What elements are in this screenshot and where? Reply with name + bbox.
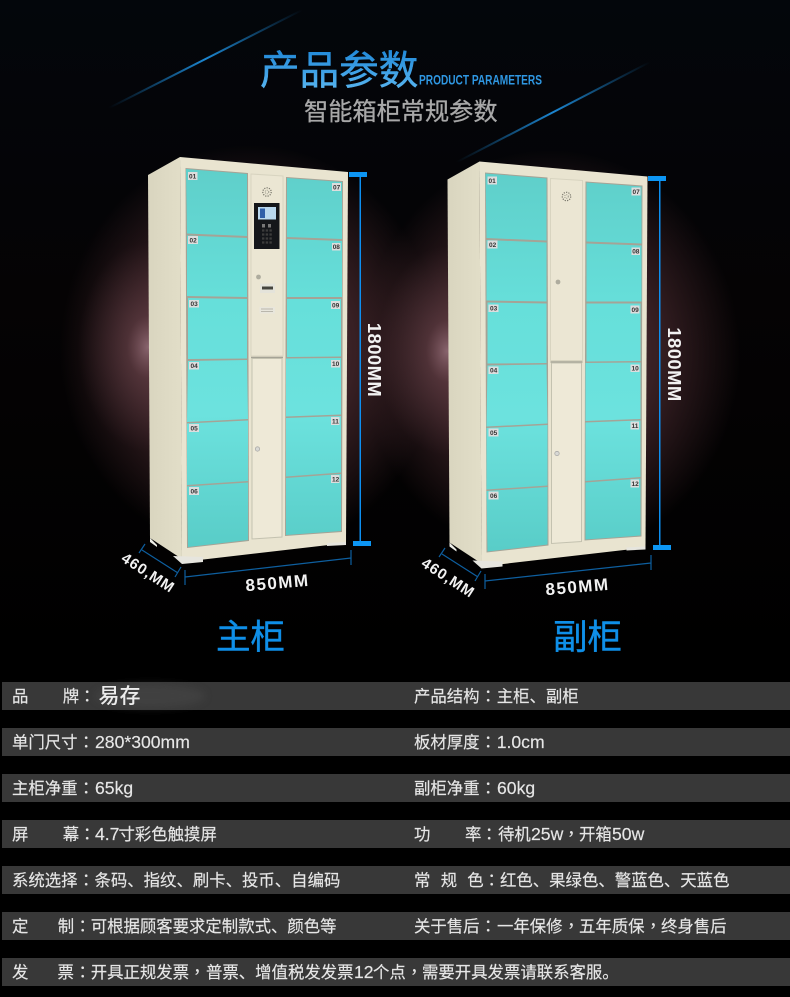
label: secondary cabinet: 副柜 [553,619,622,657]
depth dimension line [139,544,181,577]
spec row 7: 开具正规发票 [91,964,189,982]
door 09 [586,304,640,362]
icon: speaker [263,188,271,196]
depth dimension line [439,548,481,581]
spec row 3: 副柜净重 [414,780,480,798]
spec table [2,682,790,986]
door 03 [488,302,546,364]
door 10: 10 [632,366,639,372]
door 09: 09 [632,307,639,314]
spec row 4: 待机 [498,826,531,844]
spec row 4: 50w [612,824,645,844]
spec row 6: 可根据顾客要求定制款式、颜色等 [91,918,337,936]
control panel [251,174,283,358]
lower center door [552,363,582,544]
highlight: secondary cabinet left [377,246,517,456]
spec row 7: ： [74,959,91,983]
door 07 [586,182,642,244]
highlight: main cabinet left [78,242,218,452]
door 04: 04 [190,363,198,370]
door 01 [486,174,546,240]
door 08: 08 [632,248,640,256]
door 09 [287,299,341,357]
spec row 7: 需要开具发票请联系客服。 [422,964,619,982]
door 02: 02 [489,242,497,249]
door 06: 06 [490,493,498,500]
width dimension line [485,555,651,589]
spec row 4: 功 [414,826,430,844]
spec row 3: 65kg [95,778,133,798]
height label: 1800MM [364,323,385,397]
secondary cabinet [448,162,648,568]
spec row 4 [2,820,790,848]
depth label: 460,MM [118,550,178,597]
spec row 1: 品 [12,688,28,706]
spec row 2 [2,728,790,756]
spec row 4: 寸彩色触摸屏 [118,826,217,844]
spec row 4: 率 [465,826,481,844]
label plate [260,307,275,314]
spec row 2: 280*300mm [95,732,190,752]
door 11 [586,420,640,481]
spec row 4: ： [79,821,95,845]
spec row 7: 个点 [373,964,406,982]
spec row 5: ： [484,867,500,891]
title: 产品参数 [260,49,418,93]
door 04 [187,360,248,422]
door 03: 03 [490,306,498,312]
door 09: 09 [332,302,340,310]
spec row 3: 主柜净重 [12,780,78,798]
cabinet body [148,157,348,564]
spec row 6 [2,912,790,940]
door 04: 04 [490,368,498,374]
door 03 [188,298,247,359]
spec row 2: 单门尺寸 [12,734,78,752]
spec row 3: ： [480,775,496,799]
door 08: 08 [333,244,340,251]
spec row 1: 牌 [63,688,79,706]
door 01 [186,169,247,236]
spec row 3: ： [78,775,94,799]
spec row 2: ： [480,729,496,753]
spec row 4: ： [481,821,497,845]
spec row 6: 终身售后 [661,918,727,936]
door 07: 07 [632,189,640,196]
door 11: 11 [632,423,639,430]
spec row 5: 红色、果绿色、警蓝色、天蓝色 [500,872,729,890]
door 11 [286,416,341,476]
icon: speaker [562,192,571,201]
decorative line left [109,10,302,108]
spec row 3 [2,774,790,802]
spec row 1: 易存 [98,685,140,708]
door 11: 11 [332,418,339,426]
dimensions: main cabinet [118,172,385,597]
spec row 6: 定 [12,918,28,936]
spec row 7: 票 [58,964,74,982]
background glow: main cabinet [60,145,440,555]
height label: 1800MM [664,327,685,402]
spec row 4: 开箱 [579,826,612,844]
door 05: 05 [190,426,198,432]
icon: knob [256,275,261,279]
door 02 [187,236,247,297]
door 05 [187,420,248,485]
spec row 5: 条码、指纹、刷卡、投币、自编码 [94,872,340,890]
door 12 [286,474,341,535]
spec row 7: 普票、增值税发发票 [206,964,354,982]
subtitle: 智能箱柜常规参数 [304,99,498,126]
door 12: 12 [632,481,639,488]
background glow: secondary cabinet [360,150,740,560]
center panel [550,178,582,362]
spec row 1: 产品结构 [414,688,480,706]
door 12 [586,478,640,540]
spec row 7: ， [189,959,205,983]
spec row 4: 4.7 [95,824,119,844]
door 08 [287,239,342,297]
card reader [260,284,275,293]
door 10 [286,358,341,416]
door 02 [486,240,546,302]
cabinet body [448,162,648,568]
spec row 2: 1.0cm [497,732,545,752]
spec row 1: ： [480,683,496,707]
spec row 7: 发 [12,964,28,982]
door 01: 01 [189,174,197,180]
height dimension arrow [648,176,671,550]
icon: knob [556,280,560,284]
door 06: 06 [190,488,198,496]
width label: 850MM [245,571,310,595]
touch screen keypad [254,203,280,249]
spec row 7 [2,958,790,986]
spec row 6: 五年质保 [579,918,645,936]
spec row 5: 常 [414,872,430,890]
spec row 5: ： [78,867,94,891]
title english: PRODUCT PARAMETERS [419,72,542,88]
spec row 1: 主柜、副柜 [497,688,579,706]
door 06 [187,482,248,547]
spec row 6: ： [480,913,496,937]
width label: 850MM [545,575,610,599]
spec row 4: 屏 [12,826,28,844]
spec row 7: ， [406,959,422,983]
spec row 6: ， [563,913,579,937]
spec row 3: 60kg [497,778,535,798]
decorative line right [457,62,650,162]
door 10: 10 [332,361,340,368]
door 10 [586,362,640,421]
door 07: 07 [333,184,341,192]
spec row 4: ， [563,821,579,845]
door 06 [486,487,548,552]
main cabinet [148,157,348,564]
door 02: 02 [190,238,197,244]
spec row 1: ： [79,683,95,707]
spec row 5: 系统选择 [12,872,78,890]
spec row 5: 规 [441,872,457,890]
door 03: 03 [190,301,198,308]
door 12: 12 [332,476,340,484]
label: main cabinet: 主柜 [216,619,285,657]
height dimension arrow [349,172,371,546]
spec row 7: 12 [354,962,374,982]
dimensions: secondary cabinet [418,176,685,602]
spec row 4: 25w [531,824,564,844]
door 05: 05 [490,430,498,437]
door 07 [287,178,342,239]
spec row 1 [2,682,790,710]
door 01: 01 [488,178,496,185]
spec row 6: ， [645,913,661,937]
spec row 2: ： [78,729,94,753]
door 08 [586,244,642,302]
spec row 4: 幕 [63,826,79,844]
door 05 [486,425,548,490]
depth label: 460,MM [418,555,478,602]
lower center door [252,358,282,539]
spec row 2: 板材厚度 [414,734,480,752]
spec row 6: 制 [58,918,74,936]
spec row 5: 色 [467,872,484,890]
door 04 [486,364,548,426]
spec row 6: 关于售后 [414,918,480,936]
spec row 6: ： [74,913,91,937]
spec row 5 [2,866,790,894]
width dimension line [185,550,351,585]
spec row 6: 一年保修 [497,918,563,936]
